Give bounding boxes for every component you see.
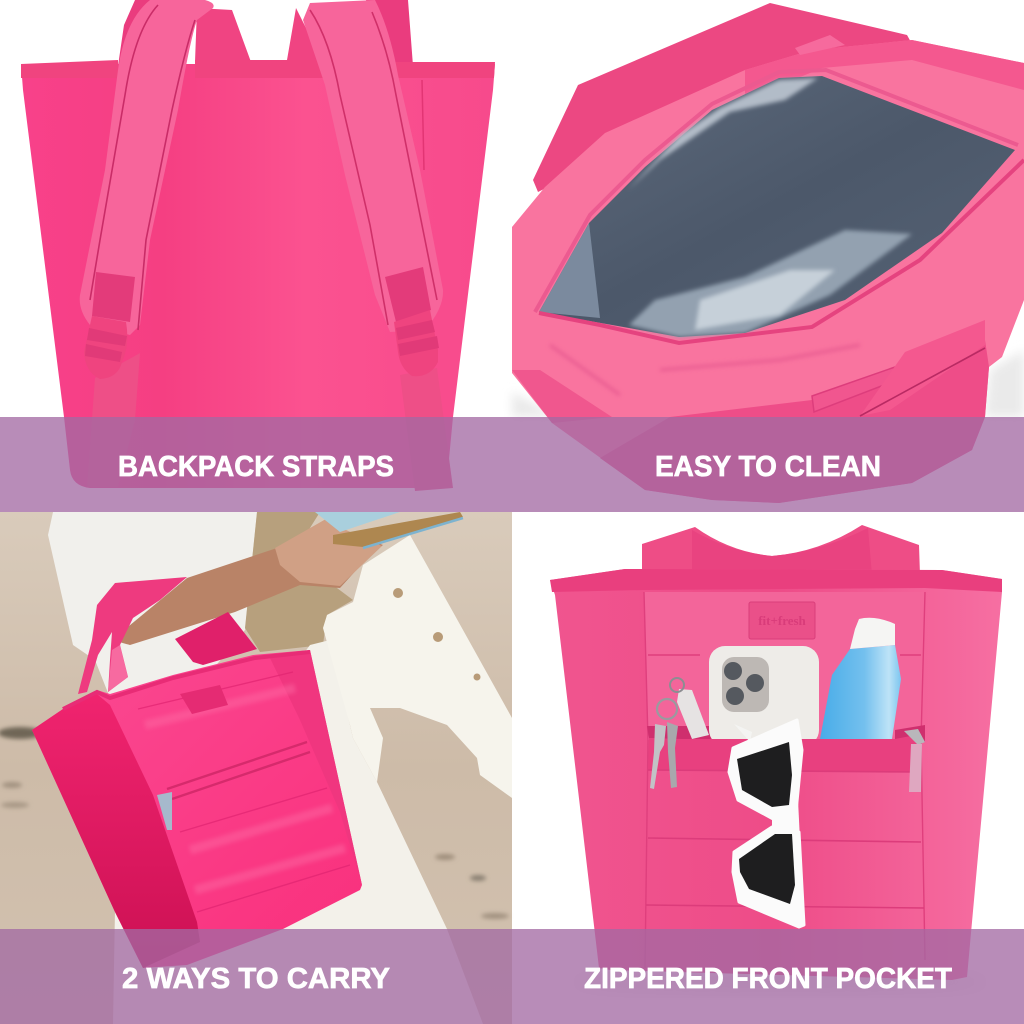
right strap <box>303 0 443 332</box>
bag back body <box>21 64 495 488</box>
logo patch <box>749 602 815 639</box>
keys <box>650 678 684 789</box>
quilting lines <box>138 672 350 912</box>
sand background <box>0 512 512 1024</box>
sunglasses <box>729 720 804 927</box>
tote logo patch <box>180 685 228 714</box>
panel: 2 ways to carry photo <box>0 512 512 1024</box>
banner: backpack straps: BACKPACK STRAPS <box>118 451 394 483</box>
key fob <box>677 689 709 739</box>
panel: backpack straps <box>21 0 495 491</box>
pink tote <box>32 650 362 968</box>
sand speckles <box>0 727 509 919</box>
right buckle and webbing <box>385 267 431 322</box>
handle <box>642 525 920 575</box>
panel: zippered front pocket <box>550 525 1002 990</box>
tote side gusset <box>32 694 200 968</box>
banner: easy to clean <box>512 417 1024 512</box>
zipper tracks <box>539 160 1024 343</box>
banner: zippered front pocket <box>512 929 1024 1024</box>
pocket <box>648 734 921 772</box>
phone <box>709 646 819 746</box>
open bag exterior <box>512 40 1024 503</box>
tote zipper <box>167 742 310 799</box>
woman's white shirt <box>48 512 257 698</box>
banner: easy to clean: EASY TO CLEAN <box>655 451 881 483</box>
left strap <box>80 0 214 335</box>
banner: zippered front pocket: ZIPPERED FRONT POCKET <box>584 963 952 995</box>
knit top <box>245 512 353 652</box>
shirt buttons <box>393 588 480 680</box>
strap loops behind <box>195 8 322 62</box>
front handle <box>78 577 187 694</box>
top rim <box>21 60 495 78</box>
seams <box>644 592 925 968</box>
zip pull <box>904 729 925 792</box>
book <box>315 512 463 548</box>
pocket seams <box>646 770 924 908</box>
back handle <box>175 612 257 665</box>
fabric folds <box>550 345 860 395</box>
pocket and front darker area <box>600 340 989 503</box>
pocket slit shadow <box>647 725 925 742</box>
zip pull <box>157 792 172 830</box>
tote right gusset <box>270 650 362 885</box>
silver lining <box>539 76 1015 337</box>
rim stitch <box>63 652 310 709</box>
arm and hand <box>112 512 383 645</box>
left buckle and webbing <box>92 272 135 322</box>
soft shadow <box>512 350 1024 417</box>
bottle <box>820 618 901 739</box>
banner: 2 ways to carry <box>0 929 512 1024</box>
upper centre panel <box>644 592 925 740</box>
logo patch: fit+fresh <box>758 613 807 628</box>
soft shadow <box>570 974 990 990</box>
open white shirt <box>323 535 512 798</box>
white trousers <box>113 640 483 1024</box>
carrying handle <box>533 3 912 192</box>
top handle webbing <box>118 0 413 66</box>
banner: 2 ways to carry: 2 WAYS TO CARRY <box>122 963 390 995</box>
phone camera <box>722 657 769 712</box>
banner: backpack straps <box>0 417 512 512</box>
top rim <box>550 569 1002 592</box>
tote body <box>550 569 1002 980</box>
panel: easy to clean <box>512 3 1024 503</box>
